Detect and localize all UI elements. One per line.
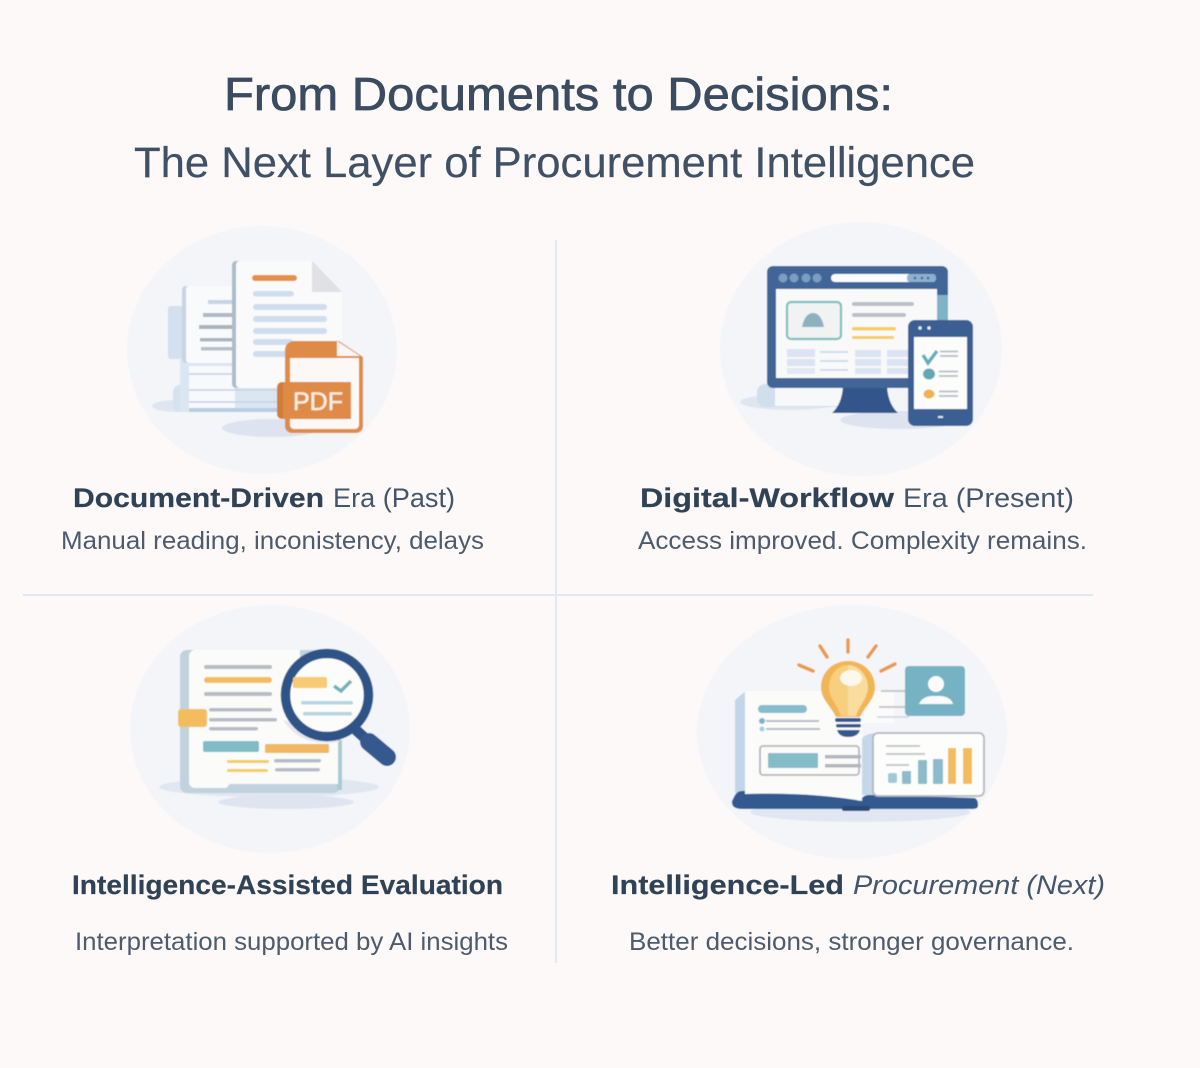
icon: documents and PDF: PDF [293, 388, 343, 416]
heading: digital-workflow era: Era (Present) [903, 483, 1074, 513]
heading: digital-workflow era [640, 483, 1074, 513]
text: intelligence-led description: Better decisions, stronger governance. [629, 928, 1074, 956]
heading: intelligence-led procurement [611, 870, 1105, 900]
panel: digital-workflow era [638, 222, 1087, 555]
icon: monitor and phone [720, 222, 1002, 476]
text: digital-workflow description: Access improved. Complexity remains. [638, 527, 1087, 555]
heading: document-driven era: Era (Past) [333, 483, 455, 513]
heading: document-driven era [73, 483, 455, 513]
icon: documents and PDF [127, 226, 397, 474]
panel: intelligence-led procurement [611, 605, 1105, 956]
panel: document-driven era [61, 226, 484, 555]
title: The Next Layer of Procurement Intelligence [134, 139, 975, 187]
heading: document-driven era: Document-Driven [73, 483, 324, 513]
title: From Documents to Decisions: [224, 68, 893, 120]
heading: intelligence-led procurement: Intelligence-Led [611, 870, 844, 900]
panel: intelligence-assisted evaluation [72, 605, 508, 956]
text: document-driven description: Manual reading, inconistency, delays [61, 527, 484, 555]
icon: book, bulb and chart [697, 605, 1007, 859]
heading: digital-workflow era: Digital-Workflow [640, 483, 895, 513]
text: intelligence-assisted description: Interpretation supported by AI insights [75, 928, 508, 956]
heading: intelligence-assisted evaluation: Intelligence-Assisted Evaluation [72, 870, 503, 900]
heading: intelligence-led procurement: Procurement (Next) [853, 870, 1105, 900]
icon: document and magnifier [130, 605, 410, 853]
title [134, 68, 975, 187]
